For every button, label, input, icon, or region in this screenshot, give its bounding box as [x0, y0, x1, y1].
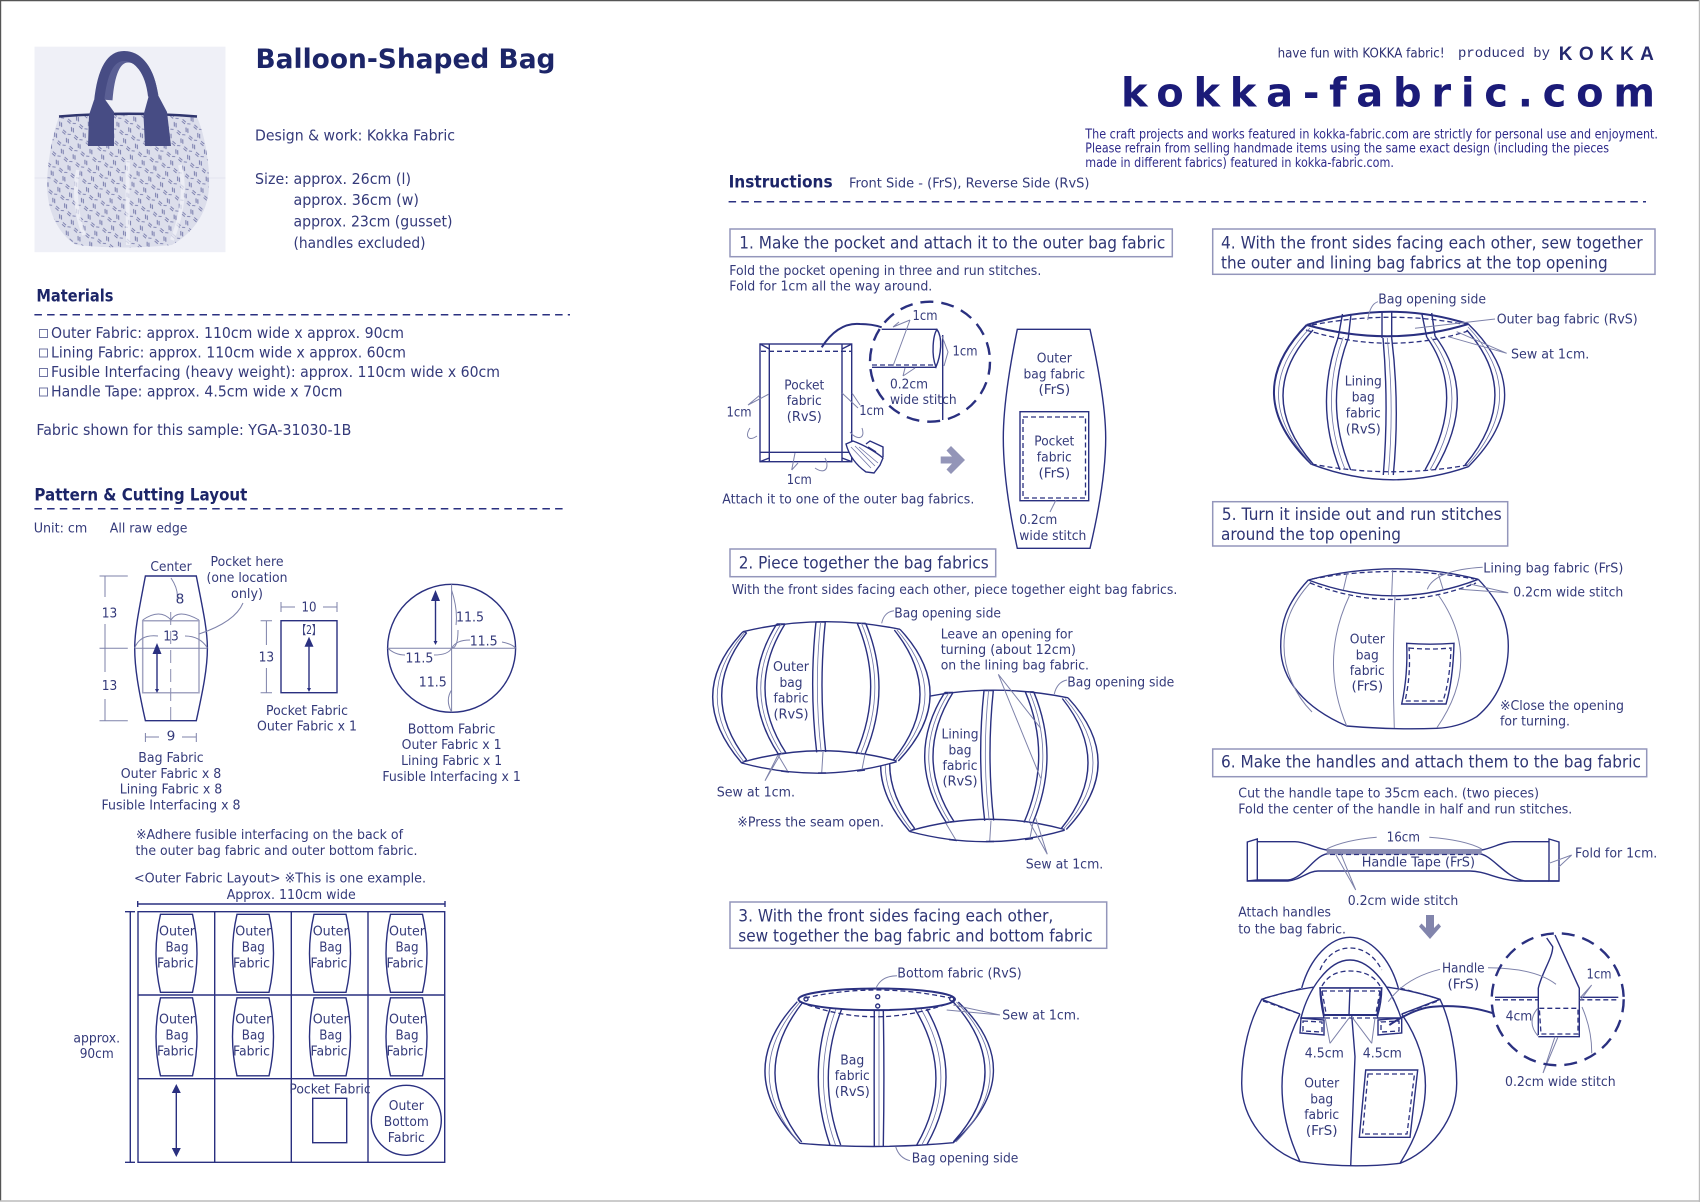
diagram: bottom fabric pattern: Lining Fabric x 1 — [401, 753, 502, 769]
diagram: bag with handles: 4.5cm — [1363, 1045, 1402, 1061]
diagram: pocket fabric folded: 1cm — [859, 403, 884, 419]
diagram: bag with bottom fabric — [765, 988, 993, 1147]
diagram: pocket fabric folded — [726, 344, 884, 488]
chart: outer fabric cutting layout: Outer — [313, 1012, 349, 1028]
diagram: bag fabric pattern — [100, 554, 288, 814]
diagram: handle tape: 0.2cm wide stitch — [1348, 893, 1458, 909]
step 1 heading box: 1. Make the pocket and attach it to the outer bag fabric — [739, 232, 1165, 252]
chart: outer fabric cutting layout: Bag — [319, 940, 342, 956]
step 6 heading box — [1213, 749, 1647, 777]
diagram: bottom fabric pattern: Bottom Fabric — [408, 721, 495, 737]
diagram: bottom fabric pattern: 11.5 — [419, 675, 447, 691]
unit note: Unit: cm — [34, 520, 87, 536]
materials list: Outer Fabric: approx. 110cm wide x approx. 90cm — [51, 324, 404, 342]
panel: step 5 — [1213, 502, 1624, 729]
step 5 callouts: for turning. — [1500, 713, 1570, 729]
diagram: outer bag, reverse side: Outer — [773, 659, 809, 675]
chart: outer fabric cutting layout: Outer — [235, 1012, 272, 1028]
step 3 callouts: Bag opening side — [912, 1151, 1018, 1167]
diagram: lining bag, reverse side: bag — [948, 742, 972, 758]
chart: outer fabric cutting layout: Fabric — [388, 1130, 425, 1146]
diagram: outer bag, reverse side: bag — [780, 675, 802, 691]
diagram: bag turned inside out: bag — [1356, 647, 1379, 663]
step 2 callouts: Sew at 1cm. — [1026, 856, 1103, 872]
step 2 heading box: 2. Piece together the bag fabrics — [739, 552, 989, 572]
chart: outer fabric cutting layout: Bag — [166, 1028, 188, 1044]
step 4 callouts: Sew at 1cm. — [1511, 346, 1589, 362]
diagram: outer bag, reverse side: fabric — [774, 691, 808, 707]
step 3 callouts: Sew at 1cm. — [1002, 1007, 1080, 1023]
step 2 callouts: on the lining bag fabric. — [941, 657, 1089, 673]
step 3 heading box: 3. With the front sides facing each other, — [738, 906, 1053, 926]
arrow: right — [941, 446, 965, 474]
step 6 attach note — [1238, 905, 1346, 937]
diagram: pocket fabric pattern: 【2】 — [297, 623, 321, 637]
diagram: bottom fabric pattern: Fusible Interfacing x 1 — [382, 769, 521, 785]
diagram: bag turned inside out: Outer — [1350, 631, 1385, 647]
diagram: pocket fabric folded: fabric — [787, 393, 822, 409]
step 2 callouts: ※Press the seam open. — [737, 815, 884, 831]
step 3 heading box: sew together the bag fabric and bottom fabric — [738, 926, 1093, 946]
callout: handle attachment detail: Handle — [1442, 960, 1485, 976]
diagram: pocket on outer bag fabric: (FrS) — [1038, 465, 1070, 481]
header: kokka branding: produced by — [1458, 47, 1550, 62]
design and size text block: Size: approx. 26cm (l) — [255, 170, 411, 188]
diagram: lining bag, reverse side — [881, 690, 1098, 842]
diagram: lining bag, reverse side: (RvS) — [942, 774, 978, 790]
diagram: pocket fabric pattern: 13 — [259, 650, 274, 666]
chart: outer fabric cutting layout: Bag — [319, 1028, 342, 1044]
disclaimer text — [1084, 127, 1658, 171]
step 2 callouts: turning (about 12cm) — [941, 642, 1076, 658]
chart: outer fabric cutting layout: Fabric — [157, 1043, 194, 1059]
diagram: bag with bottom fabric: Bag — [840, 1052, 864, 1068]
fabric sample note: Fabric shown for this sample: YGA-31030-1B — [36, 421, 351, 439]
diagram: bag fabric pattern: 13 — [102, 606, 117, 622]
step 4 heading box — [1213, 229, 1655, 274]
step 4 callouts: Outer bag fabric (RvS) — [1497, 311, 1638, 327]
diagram: lining bag, reverse side: Lining — [942, 726, 978, 742]
panel: step 3 — [730, 902, 1107, 1167]
diagram: bottom fabric pattern: 11.5 — [405, 650, 433, 666]
step 4 heading box: the outer and lining bag fabrics at the top opening — [1221, 252, 1608, 272]
unit note — [34, 520, 188, 536]
chart: outer fabric cutting layout: Bag — [242, 1028, 265, 1044]
step 5 callouts: Lining bag fabric (FrS) — [1483, 561, 1623, 577]
diagram: pocket fabric pattern — [257, 600, 357, 735]
diagram: pocket fabric folded: 1cm — [726, 405, 752, 421]
diagram: outer bag, reverse side: (RvS) — [774, 706, 808, 722]
diagram: bag fabric pattern: 8 — [176, 591, 184, 607]
callout: handle attachment detail — [1388, 933, 1624, 1090]
diagram: bag turned inside out: fabric — [1350, 663, 1385, 679]
diagram: pocket fabric folded: (RvS) — [787, 409, 822, 425]
diagram: bag fabric pattern: only) — [231, 586, 263, 602]
step 2 callouts: Leave an opening for — [941, 626, 1073, 642]
chart: outer fabric cutting layout: 90cm — [80, 1046, 114, 1062]
unit note: All raw edge — [110, 520, 188, 536]
panel: step 6 — [1213, 749, 1657, 1166]
diagram: handle tape: Fold for 1cm. — [1575, 845, 1657, 861]
design and size text block — [255, 127, 455, 252]
step 5 callouts: ※Close the opening — [1500, 698, 1624, 714]
diagram: pocket fabric folded: Pocket — [784, 377, 825, 393]
chart: outer fabric cutting layout — [73, 901, 445, 1162]
diagram: handle tape: 16cm — [1387, 830, 1420, 846]
diagram: bag with handles: Outer — [1304, 1075, 1340, 1091]
chart: outer fabric cutting layout: Bag — [242, 940, 265, 956]
diagram: bottom fabric pattern: 11.5 — [456, 610, 484, 626]
heading: pattern and cutting layout: Pattern & Cutting Layout — [34, 486, 247, 506]
chart: outer fabric cutting layout: Outer — [389, 924, 425, 940]
diagram: lining bag, reverse side: fabric — [942, 758, 978, 774]
diagram: bag with handles: bag — [1310, 1091, 1333, 1107]
icon: iron — [846, 441, 883, 473]
diagram: bag fabric pattern: Fusible Interfacing x 8 — [102, 798, 240, 814]
step 2 callouts: Bag opening side — [894, 605, 1001, 621]
diagram: pocket fabric folded: 1cm — [787, 472, 812, 488]
chart: outer fabric cutting layout: Pocket Fabric — [289, 1082, 371, 1098]
diagram: lining and outer bag joined: bag — [1352, 390, 1375, 406]
diagram: pocket on outer bag fabric: Pocket — [1034, 434, 1075, 450]
diagram: bag turned inside out — [1281, 569, 1508, 729]
panel: step 1 — [722, 229, 1172, 548]
chart: outer fabric cutting layout: Fabric — [386, 1043, 424, 1059]
step 3 heading box — [730, 902, 1107, 948]
callout: handle attachment detail: 1cm — [1586, 967, 1612, 983]
diagram: outer bag, reverse side — [713, 622, 930, 773]
diagram: lining and outer bag joined: (RvS) — [1346, 421, 1381, 437]
callout: handle attachment detail: (FrS) — [1447, 976, 1479, 992]
chart: outer fabric cutting layout: Bag — [166, 940, 188, 956]
diagram: bag fabric pattern: 13 — [102, 678, 117, 694]
diagram: pocket on outer bag fabric: Outer — [1037, 350, 1072, 366]
chart: outer fabric cutting layout: approx. — [73, 1031, 120, 1047]
step 1 instructions — [729, 263, 1041, 295]
diagram: bag fabric pattern: 9 — [167, 729, 175, 745]
step 6 attach note: to the bag fabric. — [1238, 921, 1346, 937]
header: kokka branding: kokka-fabric.com — [1121, 71, 1655, 117]
title: Balloon-Shaped Bag — [256, 44, 556, 75]
step 4 callouts: Bag opening side — [1378, 291, 1486, 307]
step 2 callouts: Bag opening side — [1067, 675, 1174, 691]
fusible interfacing note: ※Adhere fusible interfacing on the back of — [136, 827, 404, 843]
step 6 instructions: Cut the handle tape to 35cm each. (two pieces) — [1238, 786, 1539, 802]
diagram: handle tape: Handle Tape (FrS) — [1362, 855, 1475, 871]
step 5 heading box: around the top opening — [1221, 524, 1401, 544]
step 1 attach note: Attach it to one of the outer bag fabrics. — [722, 491, 974, 507]
diagram: bag fabric pattern: Outer Fabric x 8 — [121, 766, 221, 782]
callout: fold detail: 1cm — [912, 308, 938, 324]
chart: outer fabric cutting layout: Bottom — [384, 1114, 429, 1130]
diagram: bottom fabric pattern: Outer Fabric x 1 — [402, 737, 502, 753]
diagram: bag fabric pattern: Pocket here — [210, 554, 284, 570]
diagram: bottom fabric pattern — [382, 584, 521, 785]
step 5 callouts: 0.2cm wide stitch — [1513, 585, 1623, 601]
panel: pattern and cutting layout — [34, 486, 564, 1162]
chart: outer fabric cutting layout: Fabric — [233, 1043, 270, 1059]
callout: fold detail — [822, 302, 990, 422]
callout: handle attachment detail: 0.2cm wide stitch — [1505, 1074, 1616, 1090]
step 2 instructions: With the front sides facing each other, piece together eight bag fabrics. — [732, 582, 1177, 598]
panel: materials — [34, 287, 570, 439]
step 1 instructions: Fold for 1cm all the way around. — [729, 279, 932, 295]
heading: materials: Materials — [36, 287, 113, 307]
step 4 callouts — [1368, 291, 1638, 362]
step 5 callouts — [1427, 561, 1624, 729]
chart: outer fabric cutting layout: Outer — [235, 924, 272, 940]
design and size text block: approx. 23cm (gusset) — [294, 213, 452, 231]
panel: step 4 — [1213, 229, 1655, 480]
diagram: pocket on outer bag fabric: bag fabric — [1023, 366, 1085, 382]
heading: instructions: Instructions — [729, 172, 833, 192]
diagram: bag fabric pattern: Bag Fabric — [138, 750, 204, 766]
materials list — [40, 324, 500, 400]
diagram: bag with handles — [1242, 937, 1457, 1166]
diagram: handle tape — [1247, 830, 1657, 909]
diagram: pocket on outer bag fabric: wide stitch — [1019, 528, 1086, 544]
diagram: bag with handles: 4.5cm — [1305, 1045, 1344, 1061]
diagram: lining and outer bag joined: Lining — [1345, 374, 1382, 390]
diagram: lining and outer bag joined: fabric — [1346, 405, 1381, 421]
disclaimer text: made in different fabrics) featured in kokka-fabric.com. — [1085, 156, 1394, 171]
header: kokka branding — [1121, 44, 1655, 117]
outer fabric layout heading: <Outer Fabric Layout> ※This is one example. — [134, 870, 426, 886]
diagram: bag turned inside out: (FrS) — [1351, 679, 1383, 695]
chart: outer fabric cutting layout: Bag — [396, 1028, 418, 1044]
diagram: lining and outer bag joined — [1274, 312, 1505, 480]
materials list: Handle Tape: approx. 4.5cm wide x 70cm — [51, 382, 342, 400]
diagram: pocket fabric pattern: Pocket Fabric — [266, 703, 348, 719]
diagram: bottom fabric pattern: 11.5 — [470, 634, 498, 650]
chart: outer fabric cutting layout: Outer — [159, 1012, 195, 1028]
design and size text block: (handles excluded) — [294, 234, 426, 252]
disclaimer text: Please refrain from selling handmade items using the same exact design (including the pieces — [1085, 142, 1609, 157]
step 1 instructions: Fold the pocket opening in three and run stitches. — [729, 263, 1041, 279]
step 5 heading box — [1213, 502, 1508, 546]
step 1 heading box — [730, 229, 1172, 257]
diagram: bag fabric pattern: Center — [150, 559, 192, 575]
chart: outer fabric cutting layout: Outer — [389, 1012, 425, 1028]
diagram: pocket on outer bag fabric: fabric — [1037, 450, 1072, 466]
diagram: bag fabric pattern: 13 — [163, 629, 179, 645]
chart: outer fabric cutting layout: Fabric — [386, 955, 424, 971]
callout: fold detail: wide stitch — [890, 392, 957, 408]
outer fabric layout heading: Approx. 110cm wide — [227, 887, 356, 903]
fusible interfacing note — [136, 827, 418, 859]
chart: outer fabric cutting layout: Bag — [396, 940, 418, 956]
diagram: bag with bottom fabric: (RvS) — [835, 1084, 870, 1100]
outer fabric layout heading — [134, 870, 426, 903]
step 2 heading box — [730, 549, 996, 577]
heading: instructions: Front Side - (FrS), Reverse Side (RvS) — [849, 175, 1090, 191]
step 5 heading box: 5. Turn it inside out and run stitches — [1222, 504, 1502, 524]
diagram: bag fabric pattern: Lining Fabric x 8 — [120, 782, 222, 798]
step 2 callouts — [717, 605, 1174, 872]
diagram: pocket fabric pattern: 10 — [302, 600, 316, 616]
diagram: bag with bottom fabric: fabric — [835, 1068, 870, 1084]
diagram: pocket on outer bag fabric: (FrS) — [1038, 382, 1070, 398]
step 6 attach note: Attach handles — [1238, 905, 1331, 921]
step 3 callouts: Bottom fabric (RvS) — [897, 966, 1022, 982]
arrow: down — [1419, 915, 1441, 939]
callout: fold detail: 0.2cm — [890, 376, 928, 392]
materials list: Lining Fabric: approx. 110cm wide x approx. 60cm — [51, 344, 406, 362]
chart: outer fabric cutting layout: Fabric — [310, 955, 348, 971]
chart: outer fabric cutting layout: Fabric — [233, 955, 270, 971]
step 4 heading box: 4. With the front sides facing each other, sew together — [1221, 232, 1643, 252]
step 6 instructions — [1238, 786, 1572, 817]
diagram: bag fabric pattern: (one location — [206, 570, 288, 586]
photo: finished balloon bag — [34, 47, 226, 252]
chart: outer fabric cutting layout: Outer — [389, 1098, 424, 1114]
design and size text block: approx. 36cm (w) — [294, 191, 419, 209]
step 6 heading box: 6. Make the handles and attach them to the bag fabric — [1221, 752, 1641, 772]
step 6 instructions: Fold the center of the handle in half and run stitches. — [1238, 801, 1572, 817]
step 3 callouts — [876, 966, 1080, 1167]
header: kokka branding: have fun with KOKKA fabric! — [1278, 45, 1445, 61]
materials list: Fusible Interfacing (heavy weight): approx. 110cm wide x 60cm — [51, 363, 500, 381]
diagram: pocket on outer bag fabric — [1003, 329, 1106, 548]
chart: outer fabric cutting layout: Outer — [313, 924, 349, 940]
callout: handle attachment detail: 4cm — [1506, 1009, 1532, 1025]
diagram: pocket on outer bag fabric: 0.2cm — [1019, 512, 1057, 528]
diagram: bag with handles: fabric — [1304, 1107, 1339, 1123]
heading: instructions — [729, 172, 1646, 202]
chart: outer fabric cutting layout: Outer — [159, 924, 195, 940]
panel: step 2 — [713, 549, 1177, 872]
fusible interfacing note: the outer bag fabric and outer bottom fabric. — [136, 843, 418, 859]
callout: fold detail: 1cm — [952, 344, 978, 360]
design and size text block: Design & work: Kokka Fabric — [255, 127, 455, 145]
chart: outer fabric cutting layout: Fabric — [157, 955, 194, 971]
chart: outer fabric cutting layout: Fabric — [310, 1043, 348, 1059]
diagram: pocket fabric pattern: Outer Fabric x 1 — [257, 719, 357, 735]
diagram: bag with handles: (FrS) — [1306, 1123, 1338, 1139]
header: kokka branding: KOKKA — [1559, 44, 1654, 65]
step 2 callouts: Sew at 1cm. — [717, 784, 795, 800]
